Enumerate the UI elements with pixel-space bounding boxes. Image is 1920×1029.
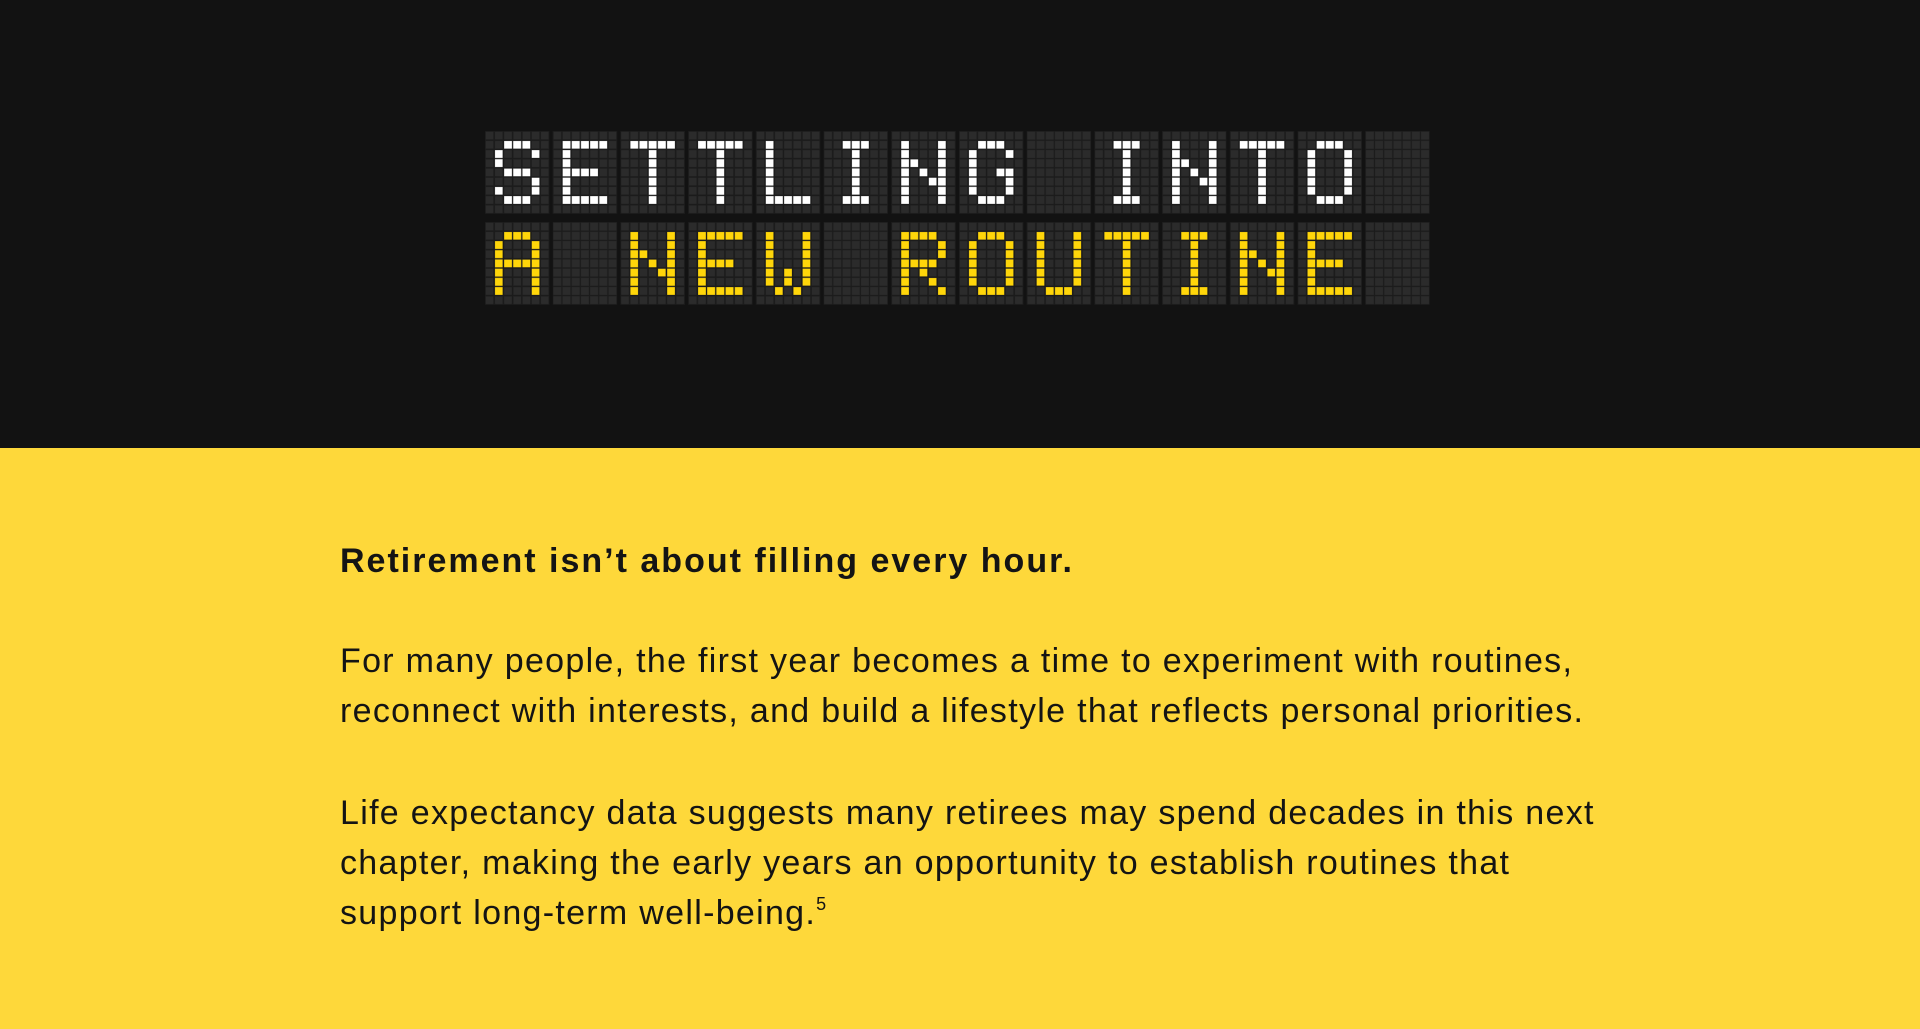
row 1: SETTLING INTO [485, 131, 1430, 214]
paragraph 2: Life expectancy data suggests many retirees may spend decades in this next [340, 794, 1595, 832]
paragraph 2: chapter, making the early years an opportunity to establish routines that [340, 844, 1510, 882]
paragraph 2 [340, 794, 1595, 932]
paragraph 1 [340, 642, 1584, 730]
title: split-flap board [485, 131, 1430, 304]
paragraph 1: reconnect with interests, and build a lifestyle that reflects personal priorities. [340, 692, 1584, 730]
paragraph 2: support long-term well-being.5 [340, 894, 826, 932]
heading: Retirement isn’t about filling every hour. [340, 542, 1074, 580]
row 2: A NEW ROUTINE [485, 222, 1430, 305]
header band [0, 0, 1920, 448]
paragraph 1: For many people, the first year becomes a time to experiment with routines, [340, 642, 1573, 680]
